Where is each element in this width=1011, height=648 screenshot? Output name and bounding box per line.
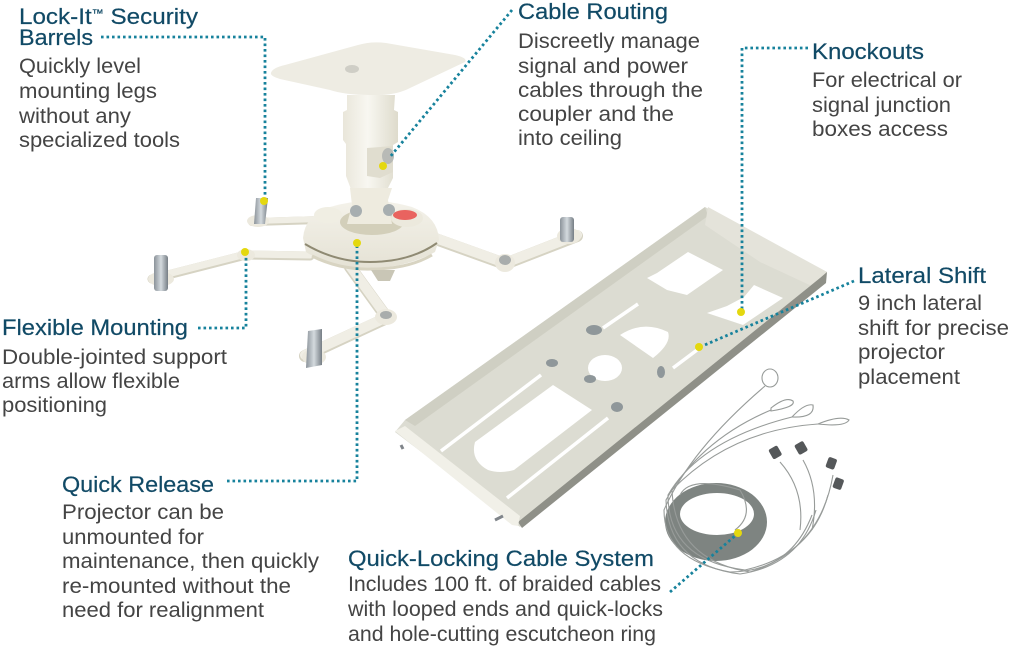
leader line: Flexible Mounting (198, 254, 246, 328)
callout: Cable Routing: coupler and the (518, 103, 674, 126)
bottom hub (371, 270, 395, 281)
callout: Lateral Shift: projector (858, 341, 945, 364)
cutouts (474, 252, 783, 472)
red release cap (393, 210, 417, 220)
callout: Quick-Locking Cable System (347, 546, 663, 646)
callout: Quick Release: maintenance, then quickly (62, 550, 320, 573)
callout: Quick Release: Projector can be (62, 501, 224, 524)
leader line: Knockouts (742, 48, 808, 309)
yellow target dots (241, 162, 745, 537)
callout: Knockouts: boxes access (812, 118, 948, 141)
leader line: Lateral Shift (700, 281, 854, 347)
tray back wall (405, 207, 708, 426)
locking barrels (154, 198, 574, 368)
arm feet (148, 215, 581, 365)
joint bolts (350, 204, 395, 217)
callout: Lock-It Security Barrels: mounting legs (19, 80, 157, 103)
swivel joint (347, 188, 392, 224)
dome lower plate (312, 255, 432, 269)
callout: Lateral Shift: shift for precise (858, 317, 1009, 340)
callout: Quick-Locking Cable System: Quick-Locking Cable System (348, 546, 654, 571)
callout: Quick-Locking Cable System: with looped ends and quick-locks (347, 598, 663, 621)
callout: Cable Routing: cables through the (518, 79, 703, 102)
leader line: Cable Routing (390, 10, 512, 157)
left button (314, 207, 342, 223)
callout: Lateral Shift: Lateral Shift (858, 263, 986, 288)
callout: Flexible Mounting: arms allow flexible (2, 370, 180, 393)
callout: Quick Release: Quick Release (62, 472, 214, 497)
tray front flange (518, 272, 827, 528)
callout: Lock-It Security Barrels: Lock-It (19, 4, 85, 29)
callout: Flexible Mounting: Double-jointed support (2, 346, 227, 369)
mount arms (152, 219, 577, 355)
column (343, 95, 398, 192)
callout: Quick Release: need for realignment (62, 599, 264, 622)
looped cable ends (664, 369, 849, 574)
callout: Flexible Mounting (2, 315, 227, 417)
tray end wall (705, 207, 827, 288)
joint cavity (340, 209, 404, 235)
leader line: Lock-It (101, 37, 265, 198)
callout: Quick Release: unmounted for (62, 526, 204, 549)
projector ceiling mount (148, 42, 581, 368)
cable coil (665, 483, 767, 561)
callout: Knockouts: signal junction (812, 94, 951, 117)
callout: Quick-Locking Cable System: and hole-cutting escutcheon ring (348, 623, 656, 646)
callout: Lock-It Security Barrels: Security (104, 4, 198, 29)
callout: Lock-It Security Barrels: specialized tools (19, 129, 180, 152)
callout: Cable Routing (518, 0, 703, 150)
callout: Quick Release (62, 472, 320, 622)
callout: Cable Routing: into ceiling (518, 127, 622, 150)
callout: Lateral Shift: placement (858, 366, 960, 389)
callout: Lateral Shift: 9 inch lateral (858, 292, 982, 315)
callout: Knockouts (812, 39, 962, 141)
callout: Lateral Shift (858, 263, 1009, 389)
plate holes (345, 65, 359, 73)
callout: Lock-It Security Barrels (18, 4, 198, 152)
callout: Knockouts: For electrical or (812, 69, 962, 92)
arm pivots (380, 255, 511, 319)
tray front lip (395, 426, 520, 526)
suspension cables (664, 369, 849, 574)
leader line: Quick-Locking Cable System (670, 535, 736, 592)
callout: Flexible Mounting: positioning (2, 394, 107, 417)
callout: Flexible Mounting: Flexible Mounting (2, 315, 188, 340)
cable routing fitting (382, 148, 394, 164)
ceiling plate (271, 42, 466, 95)
callout: Lock-It Security Barrels: without any (18, 105, 132, 128)
base dome (303, 201, 439, 268)
callout: Knockouts: Knockouts (812, 39, 924, 64)
tray floor (395, 207, 827, 527)
release button (391, 209, 423, 227)
column window (367, 146, 393, 178)
mount arm shadows (152, 220, 577, 356)
cable lock fittings (768, 441, 844, 490)
leader line: Quick Release (227, 244, 357, 481)
wing nuts (546, 325, 665, 412)
callout: Cable Routing: signal and power (518, 55, 688, 78)
ceiling plate tray (395, 207, 827, 528)
callout: Lock-It Security Barrels: ™ (92, 8, 104, 20)
callout: Quick-Locking Cable System: Includes 100 ft. of braided cables (348, 573, 661, 596)
callout: Lock-It Security Barrels: Barrels (19, 25, 93, 50)
callout: Cable Routing: Discreetly manage (518, 30, 700, 53)
callout: Lock-It Security Barrels: Quickly level (19, 55, 141, 78)
guide slots (441, 304, 697, 498)
callout: Quick Release: re-mounted without the (62, 575, 291, 598)
tray screws (401, 445, 503, 520)
dome plate grooves (305, 243, 437, 262)
